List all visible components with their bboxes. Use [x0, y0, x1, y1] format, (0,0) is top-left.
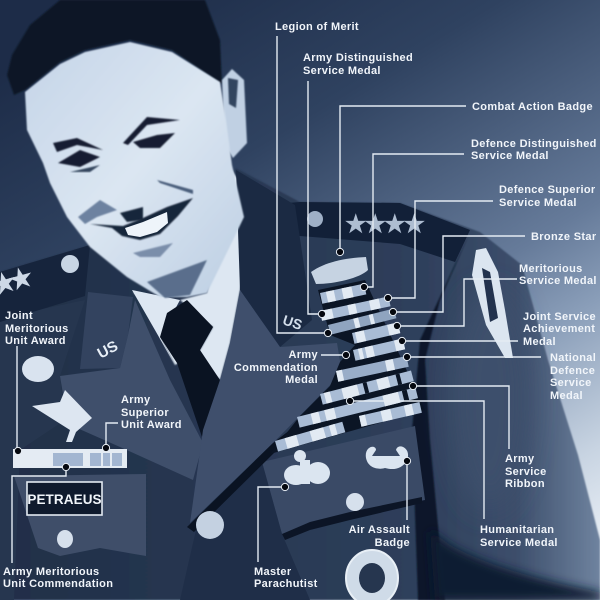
callout: National Defence Service Medal — [403, 352, 596, 402]
tie — [160, 300, 220, 437]
four stars right shoulder: ★★★★ — [345, 211, 426, 238]
pocket button right — [346, 493, 364, 511]
US collar pin left: US — [95, 338, 121, 362]
label: Commendation — [234, 362, 318, 374]
ribbon bar chest — [13, 449, 127, 468]
ribbon row 6 — [336, 356, 409, 382]
label: Achievement — [523, 323, 595, 335]
label: Army — [505, 453, 534, 465]
ribbon row 2 — [320, 296, 391, 321]
name tag — [27, 482, 102, 515]
lower sleeve shadow — [430, 530, 600, 600]
ribbon bar stripes — [53, 453, 122, 466]
callout: Defence Distinguished Service Medal — [360, 138, 597, 291]
label: Bronze Star — [531, 231, 597, 243]
neck shadow — [147, 260, 207, 298]
callout: Humanitarian Service Medal — [346, 397, 558, 549]
label: Army — [121, 394, 150, 406]
label: Service Medal — [303, 65, 381, 77]
right lapel — [190, 290, 342, 523]
label: Unit Commendation — [3, 578, 113, 590]
left pocket — [14, 474, 146, 556]
label: Unit Award — [121, 419, 182, 431]
callout: Army Meritorious Unit Commendation — [3, 463, 113, 590]
label: Meritorious — [5, 323, 69, 335]
callout: Air Assault Badge — [349, 457, 411, 549]
label: Service Medal — [471, 150, 549, 162]
shirt left panel — [132, 290, 180, 365]
pocket button left — [57, 530, 73, 548]
sleeve seam and shadow — [412, 232, 470, 600]
shoulder patch — [472, 248, 513, 358]
label: Parachutist — [254, 578, 318, 590]
epaulette button right — [307, 211, 323, 227]
US collar pin right: US — [281, 312, 304, 333]
hair — [7, 0, 222, 95]
shoulder epaulette left — [0, 245, 90, 322]
ribbon row 7 — [320, 370, 414, 405]
ribbon row 1 — [320, 284, 366, 304]
callout: Army Superior Unit Award — [102, 394, 182, 452]
right collar — [236, 170, 312, 347]
mouth — [90, 198, 193, 240]
ribbon row 8 — [297, 387, 418, 428]
callout: Army Commendation Medal — [234, 349, 350, 386]
callout: Army Service Ribbon — [409, 382, 547, 490]
ribbon row 9b — [359, 402, 422, 427]
flap shadow — [282, 497, 422, 540]
large badge at bottom — [346, 550, 398, 600]
label: Army — [289, 349, 318, 361]
label: Army Meritorious — [3, 566, 100, 578]
eyebrow left — [53, 138, 103, 152]
epaulette right — [262, 202, 470, 262]
left lapel — [60, 300, 203, 480]
ribbon row 5 — [353, 339, 405, 361]
ribbon row 9 — [275, 422, 345, 452]
label: Joint Service — [523, 311, 596, 323]
label: Service — [505, 466, 547, 478]
rack backing — [270, 280, 425, 454]
callout: Master Parachutist — [254, 483, 318, 590]
right pocket flap — [262, 426, 425, 534]
ribbon row 3 — [328, 309, 396, 335]
wings badge — [32, 390, 92, 442]
label: Ribbon — [505, 478, 545, 490]
label: Humanitarian — [480, 524, 554, 536]
shirt — [133, 170, 250, 380]
ear — [222, 69, 247, 158]
label: Service Medal — [499, 197, 577, 209]
label: Medal — [523, 336, 556, 348]
label: Service Medal — [519, 275, 597, 287]
air assault badge — [366, 446, 408, 469]
patch detail — [482, 268, 498, 322]
callout: Army Distinguished Service Medal — [303, 52, 413, 318]
label: Joint — [5, 310, 33, 322]
callout: Meritorious Service Medal — [393, 263, 597, 330]
label: Defence — [550, 365, 595, 377]
jacket button middle — [196, 511, 224, 539]
epaulette button left — [61, 255, 79, 273]
name: PETRAEUS — [27, 492, 102, 507]
face — [25, 42, 244, 297]
pocket lower panel — [180, 462, 310, 600]
ribbon row 4 — [352, 322, 400, 344]
label: Medal — [550, 390, 583, 402]
combat action badge — [311, 257, 368, 284]
chin shadow — [133, 243, 173, 257]
teeth — [125, 212, 168, 237]
left chest shading — [0, 300, 85, 600]
label: Army Distinguished — [303, 52, 413, 64]
label: Air Assault — [349, 524, 410, 536]
label: Superior — [121, 407, 169, 419]
label: Service — [550, 377, 592, 389]
eye left — [58, 150, 100, 167]
label: Badge — [375, 537, 410, 549]
eyebrow right — [123, 117, 180, 145]
label: Master — [254, 566, 292, 578]
left collar — [80, 292, 133, 369]
nostril — [120, 207, 143, 222]
ear shadow — [228, 78, 238, 108]
callout: Bronze Star — [389, 231, 597, 316]
lapel edge shadow — [187, 407, 322, 532]
badge centre — [359, 563, 385, 593]
label: Defence Distinguished — [471, 138, 597, 150]
master parachutist badge — [284, 450, 330, 485]
smile line — [157, 180, 193, 194]
label: Combat Action Badge — [472, 101, 593, 113]
callout: Combat Action Badge — [336, 101, 593, 256]
joint meritorious badge — [22, 356, 54, 382]
label: National — [550, 352, 596, 364]
ribbon rack — [270, 280, 425, 454]
callout: Defence Superior Service Medal — [384, 184, 596, 302]
jacket — [0, 168, 600, 600]
label: Medal — [285, 374, 318, 386]
mouth fold — [78, 200, 117, 224]
label: Defence Superior — [499, 184, 596, 196]
eye right — [133, 133, 175, 148]
callout: Joint Meritorious Unit Award — [5, 310, 69, 455]
eye socket left — [70, 165, 100, 172]
label: Legion of Merit — [275, 21, 359, 33]
label: Unit Award — [5, 335, 66, 347]
sleeve highlight — [450, 290, 530, 510]
callout: Joint Service Achievement Medal — [398, 311, 596, 348]
callout: Legion of Merit — [275, 21, 359, 337]
label: Meritorious — [519, 263, 583, 275]
label: Service Medal — [480, 537, 558, 549]
